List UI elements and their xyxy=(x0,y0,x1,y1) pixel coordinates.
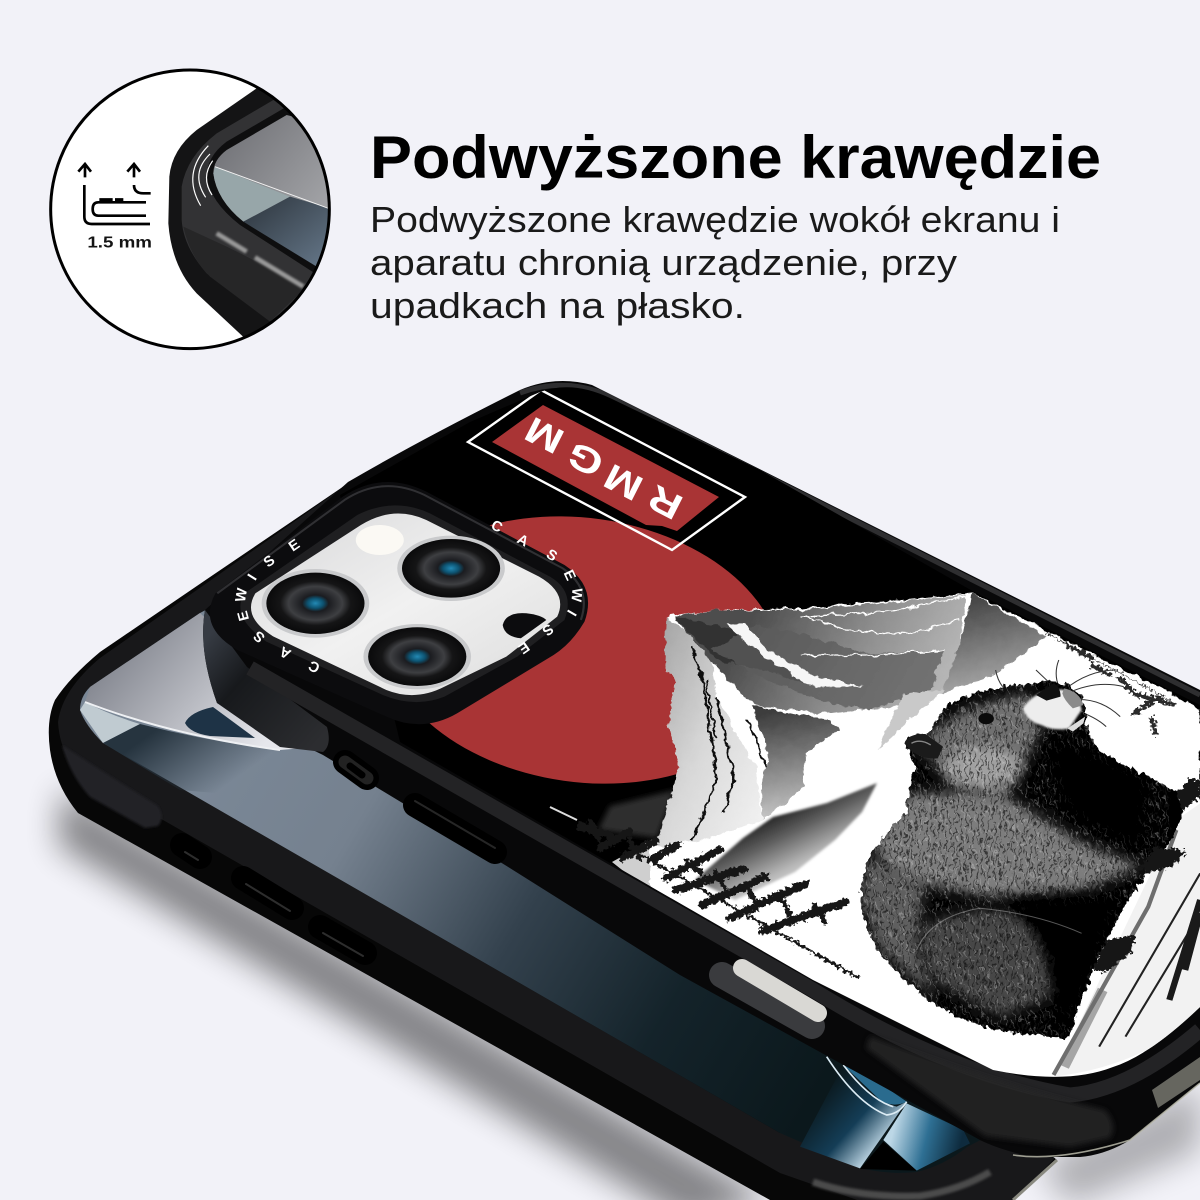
phone corner close-up xyxy=(168,88,373,340)
cliff face xyxy=(657,617,762,847)
1.5 mm label: 1.5 mm xyxy=(87,235,152,252)
rear phone xyxy=(49,482,1057,1200)
peak lower slope xyxy=(878,690,945,750)
snow cracks on ridge xyxy=(801,597,966,655)
lens ring 2 xyxy=(397,536,505,601)
beaver xyxy=(854,660,1200,1047)
logo text xyxy=(524,417,683,520)
wallpaper white curve xyxy=(85,702,280,750)
lens 3 xyxy=(368,627,466,686)
impact arcs xyxy=(193,146,213,206)
rear phone shadow xyxy=(58,790,770,1200)
ring lettering xyxy=(233,517,585,676)
snow ground xyxy=(650,593,1200,1113)
flash xyxy=(356,525,404,555)
beaver ear xyxy=(904,734,943,758)
logo text: G xyxy=(560,433,610,485)
middle mountain xyxy=(752,707,839,820)
corner lower shade xyxy=(183,227,307,322)
description xyxy=(370,199,1060,326)
silent switch xyxy=(345,762,367,778)
glass reflection line xyxy=(215,167,328,208)
silver module xyxy=(251,514,560,695)
wallpaper grey sheet xyxy=(85,613,340,750)
beaver nose xyxy=(1036,683,1061,701)
lens ring 1 xyxy=(262,569,369,638)
upper right fir branches xyxy=(1047,633,1176,733)
foothill ground xyxy=(612,835,672,898)
mountains xyxy=(657,593,1047,847)
logo text: R xyxy=(642,477,689,528)
logo box xyxy=(468,390,745,550)
front top edge highlight xyxy=(520,385,1200,695)
lower ridge xyxy=(695,783,877,900)
ridge band xyxy=(675,595,966,713)
rear frame corner pad xyxy=(62,745,162,828)
red sun xyxy=(430,516,764,784)
rock and reeds xyxy=(1054,803,1200,1077)
camera island shape xyxy=(210,482,588,724)
front phone body xyxy=(203,381,1200,1157)
circle outline xyxy=(51,70,329,349)
lens 1 xyxy=(266,573,365,634)
ring lettering: C xyxy=(306,656,323,676)
ring lettering: W xyxy=(567,587,585,603)
beaver silhouette xyxy=(861,682,1183,1038)
rear frame right edge xyxy=(1013,1160,1057,1200)
ring lettering: E xyxy=(286,536,303,555)
microphone cutout xyxy=(503,613,546,638)
side button xyxy=(415,801,495,852)
front corner pad xyxy=(866,1036,1113,1147)
ring lettering: A xyxy=(514,531,531,551)
corner lighter band xyxy=(182,100,340,323)
front phone xyxy=(203,381,1200,1157)
ring lettering: W xyxy=(233,587,251,603)
beaver muzzle xyxy=(1023,690,1082,729)
rear screen blue reflections xyxy=(800,1057,970,1171)
left wash below sun xyxy=(598,790,675,838)
ring lettering: C xyxy=(488,517,505,537)
glass upper xyxy=(213,115,333,265)
side highlights xyxy=(217,233,303,287)
rear phone body xyxy=(49,482,1057,1200)
ring lettering: S xyxy=(543,547,560,565)
right peak xyxy=(941,593,1047,693)
logo black notch xyxy=(677,497,745,540)
description: aparatu chronią urządzenie, przy xyxy=(370,242,957,283)
front frame band xyxy=(250,668,1200,1095)
art black ground xyxy=(340,387,1200,1072)
logo text: M xyxy=(597,456,649,509)
ring lettering: I xyxy=(245,572,261,583)
beaver eye xyxy=(978,713,994,724)
rear phone frame face xyxy=(58,486,1055,1200)
glass teal wedge xyxy=(213,167,290,222)
lower trees xyxy=(580,820,857,977)
rear lower highlight xyxy=(813,1172,990,1196)
description: Podwyższone krawędzie wokół ekranu i xyxy=(370,199,1060,240)
rear side buttons xyxy=(182,845,365,956)
title: Podwyższone krawędzie xyxy=(370,124,1101,191)
landscape xyxy=(650,593,1200,1113)
wallpaper dark blob xyxy=(185,707,255,738)
description: upadkach na płasko. xyxy=(370,285,745,326)
ring lettering: E xyxy=(560,568,579,583)
ring lettering: E xyxy=(235,609,253,622)
logo text: M xyxy=(518,409,570,462)
corner inner rim xyxy=(207,107,340,273)
logo outline xyxy=(468,390,745,550)
glass dark wedge xyxy=(243,197,330,267)
raised edge diagram icon xyxy=(78,164,151,224)
ring lettering: S xyxy=(261,552,279,571)
ring lettering: S xyxy=(538,620,556,639)
case artwork xyxy=(340,387,1200,1077)
beaver hands xyxy=(1092,778,1200,973)
rear phone screen xyxy=(80,560,1000,1173)
ring lettering: I xyxy=(563,607,579,618)
logo red label xyxy=(492,405,719,531)
wallpaper dark shade xyxy=(103,724,300,800)
brush streak xyxy=(550,807,577,820)
beaver teeth xyxy=(1068,717,1085,732)
detail circle: raised edge xyxy=(51,70,373,349)
outer bumper xyxy=(210,482,588,724)
circle background xyxy=(51,70,329,349)
inner bevel xyxy=(240,505,568,702)
ring lettering: E xyxy=(515,638,532,657)
front bottom light edge xyxy=(1013,1083,1200,1157)
USB port xyxy=(722,968,818,1026)
dark ridge xyxy=(676,616,806,684)
beaver upper lip xyxy=(1062,688,1083,708)
lens 2 xyxy=(402,539,500,598)
beaver fur shading xyxy=(854,680,1169,1047)
ring lettering: A xyxy=(277,642,294,662)
beaver haunch edge xyxy=(917,908,1082,950)
camera bump side xyxy=(203,610,329,752)
beaver body xyxy=(854,680,1183,1047)
front corner shadow xyxy=(1040,1085,1200,1200)
outer bumper edge xyxy=(217,486,584,620)
corner outer frame xyxy=(168,88,373,340)
wallpaper pale wedge xyxy=(80,702,140,743)
ridge snow strip xyxy=(725,623,864,687)
camera island xyxy=(210,482,588,724)
beaver whiskers xyxy=(996,660,1124,727)
ring lettering: S xyxy=(250,627,269,645)
front corner speaker xyxy=(1152,1057,1200,1108)
lens ring 3 xyxy=(363,624,471,689)
rear screen wallpaper xyxy=(80,613,340,800)
cliff cracks xyxy=(692,647,766,840)
